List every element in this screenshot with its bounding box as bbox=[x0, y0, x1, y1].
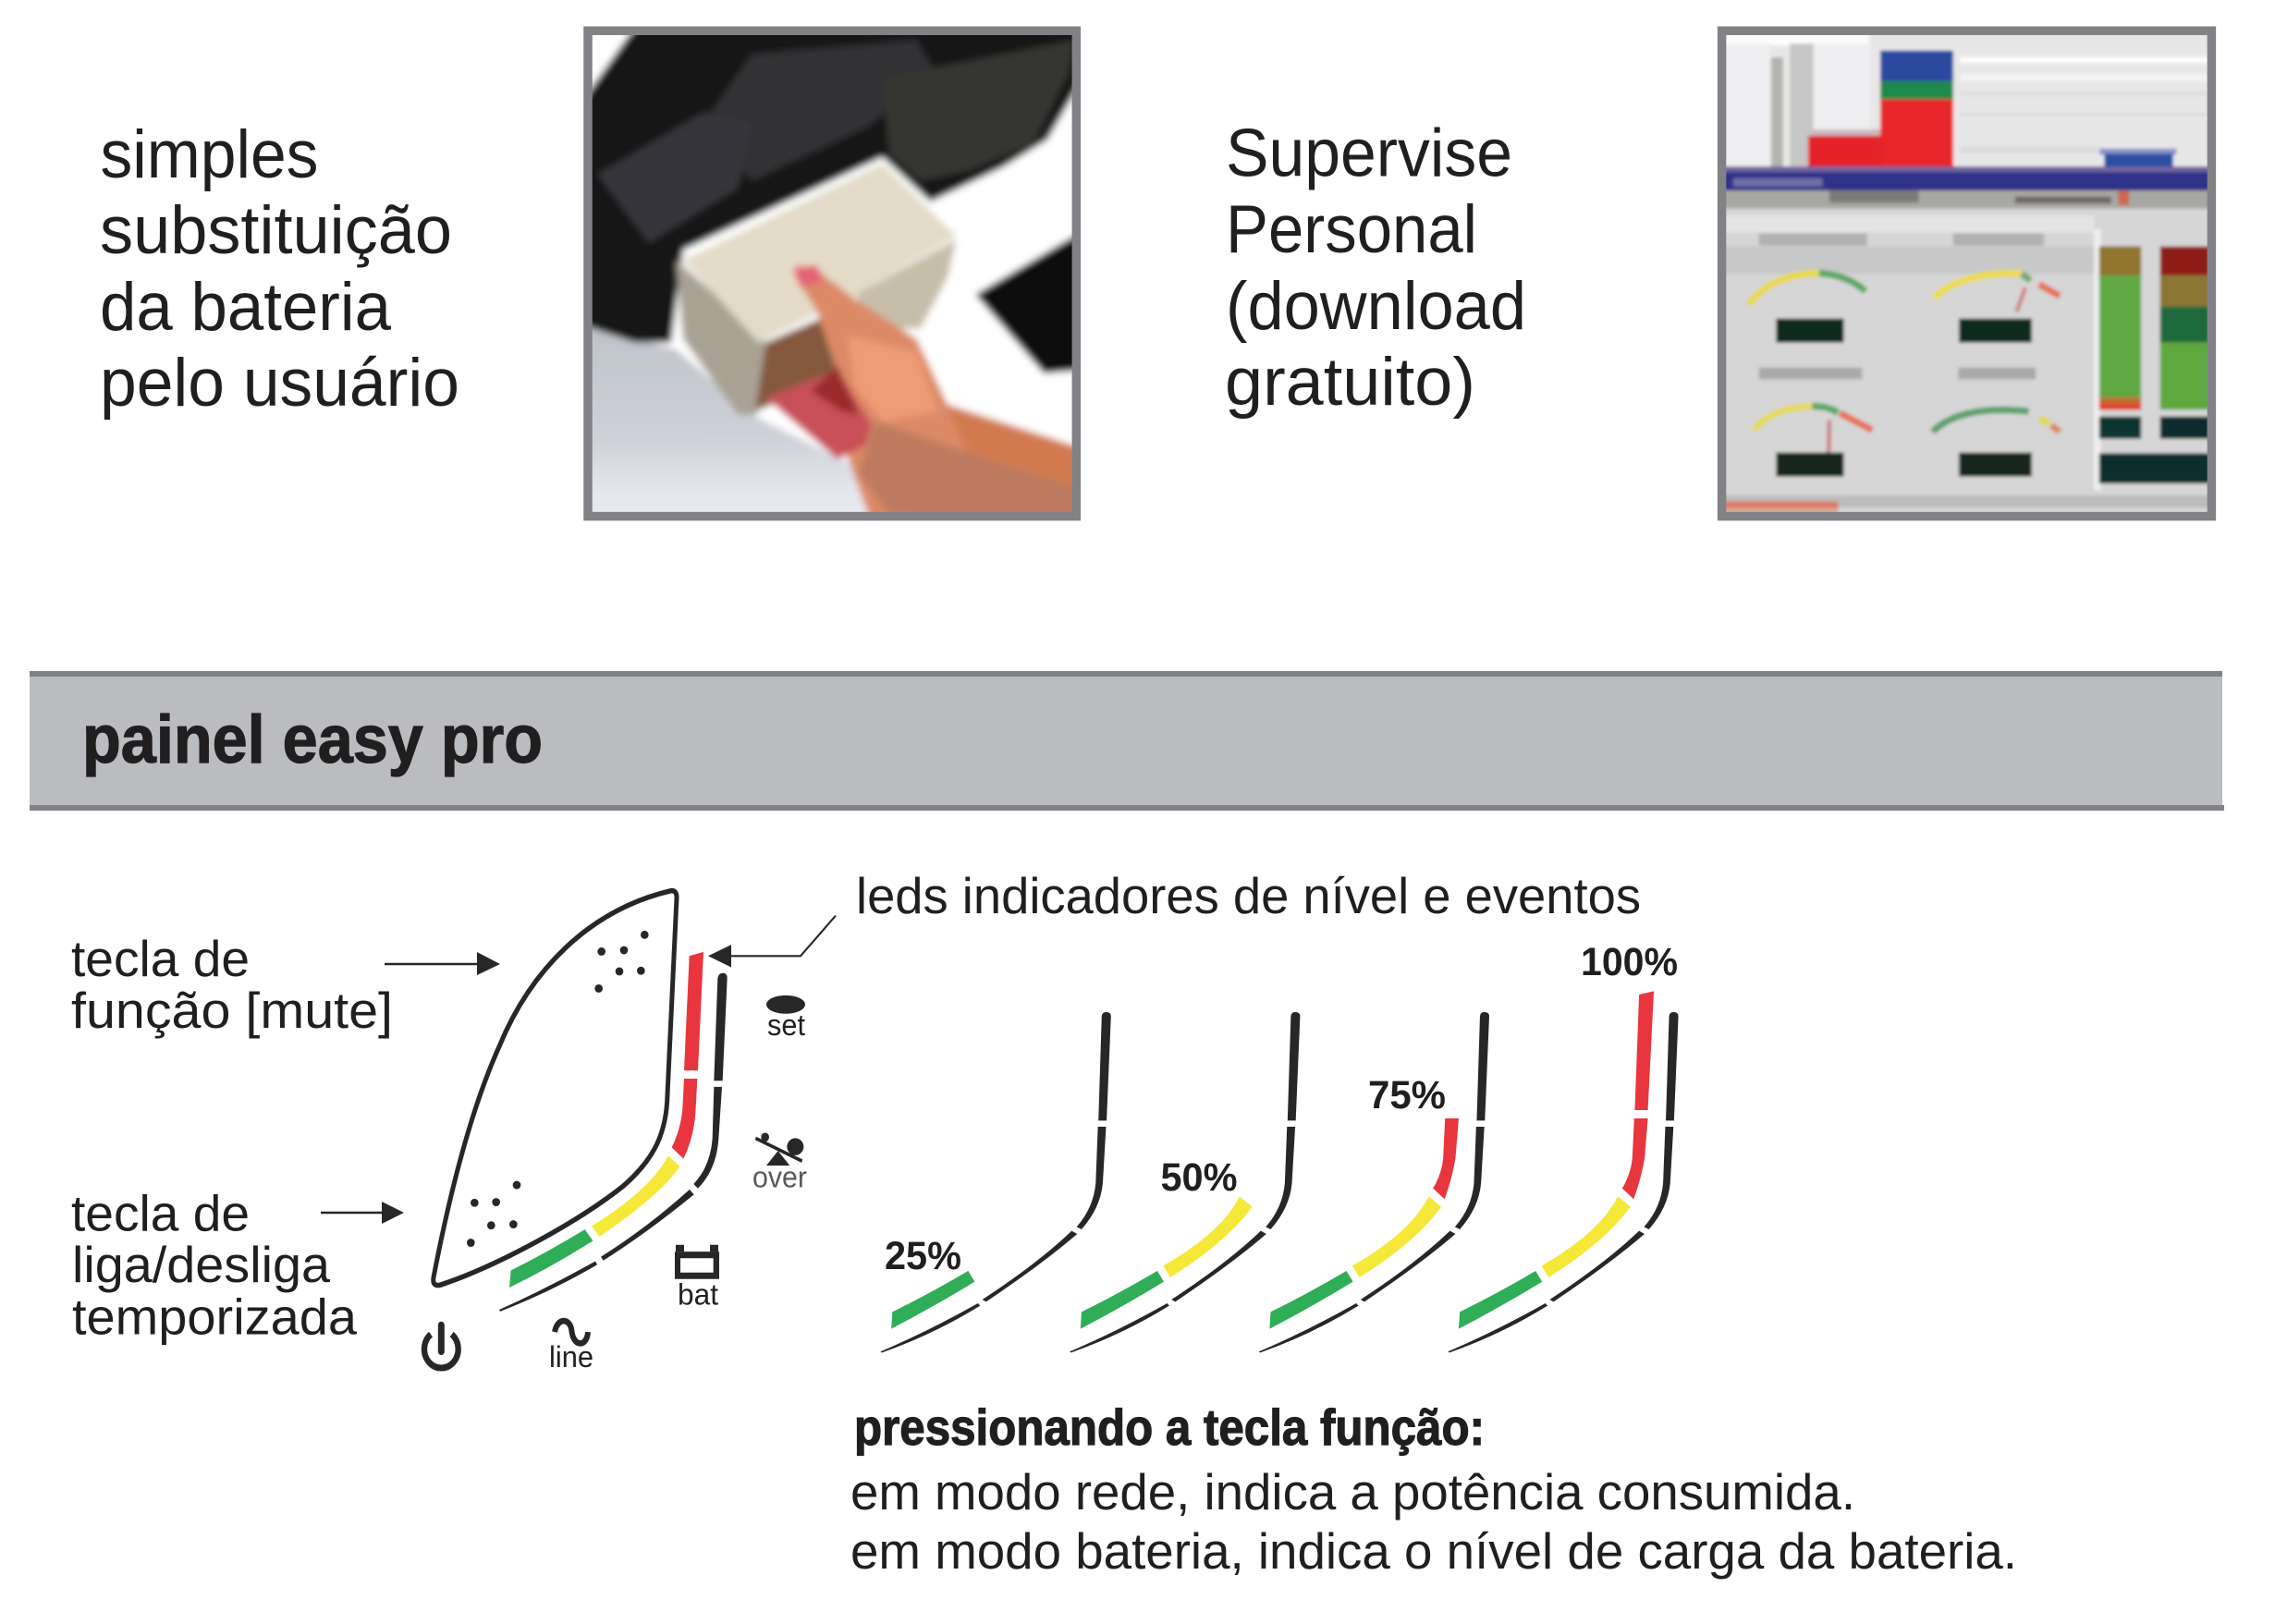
label: leds indicadores de nível e eventos: leds indicadores de nível e eventos bbox=[856, 867, 1641, 924]
text: pressing the function key explanation: em modo bateria, indica o nível de carga da bateria. bbox=[850, 1522, 2017, 1580]
icon captions: bat bbox=[678, 1277, 718, 1311]
label: tecla de liga/desliga temporizada: tecla de bbox=[71, 1185, 250, 1242]
arrow: to mute key bbox=[385, 952, 500, 975]
icon: battery bbox=[675, 1245, 719, 1279]
section header: painel easy pro bbox=[30, 671, 2224, 811]
icon: set key bbox=[766, 995, 805, 1014]
gauge: 100% bbox=[1448, 991, 1679, 1352]
gauge percent labels: 25% bbox=[885, 1234, 961, 1278]
photo: hand replacing the battery bbox=[583, 27, 1085, 525]
text: Supervise Personal (download gratuito): Supervise bbox=[1226, 116, 1512, 190]
label: tecla de função [mute]: função [mute] bbox=[71, 982, 393, 1039]
icon captions: over bbox=[752, 1161, 807, 1194]
heading text: painel easy pro bbox=[82, 702, 543, 777]
label: tecla de liga/desliga temporizada: temporizada bbox=[72, 1288, 357, 1346]
photo: Supervise Personal software screenshot bbox=[1719, 27, 2221, 521]
text: Supervise Personal (download gratuito): gratuito) bbox=[1225, 345, 1475, 420]
gauge percent labels bbox=[885, 940, 1678, 1278]
text: Supervise Personal (download gratuito): Personal bbox=[1226, 192, 1477, 267]
icon captions bbox=[549, 1008, 807, 1374]
gauge: 25% bbox=[880, 1012, 1111, 1352]
text: simples substituição da bateria pelo usuário: substituição bbox=[100, 193, 452, 268]
black level line bbox=[499, 973, 728, 1312]
key outline bbox=[434, 891, 677, 1286]
text: pressing the function key explanation: pressionando a tecla função: bbox=[854, 1398, 1485, 1456]
text: simples substituição da bateria pelo usuário: pelo usuário bbox=[100, 346, 459, 421]
text: Supervise Personal (download gratuito): (download bbox=[1226, 269, 1526, 344]
LED bar bbox=[509, 952, 703, 1288]
icon: line sine wave bbox=[555, 1321, 588, 1343]
label: tecla de função [mute]: tecla de bbox=[71, 930, 250, 987]
panel illustration: keypad with LEDs bbox=[424, 891, 836, 1368]
text: Supervise Personal (download gratuito) bbox=[1225, 116, 1526, 420]
arrow: to power key bbox=[321, 1202, 404, 1224]
gauge percent labels: 100% bbox=[1581, 940, 1678, 984]
arrow: to LEDs bbox=[708, 916, 836, 968]
gauge percent labels: 50% bbox=[1161, 1155, 1237, 1200]
text: simples substituição da bateria pelo usuário: da bateria bbox=[100, 270, 391, 345]
icon captions: line bbox=[549, 1340, 593, 1374]
icon: overload seesaw bbox=[755, 1132, 803, 1166]
text: simples substituição da bateria pelo usuário: simples bbox=[100, 117, 318, 192]
text: pressing the function key explanation bbox=[850, 1398, 2017, 1580]
icon captions: set bbox=[767, 1008, 805, 1042]
label: tecla de liga/desliga temporizada: liga/desliga bbox=[72, 1236, 330, 1293]
text: simples substituição da bateria pelo usuário bbox=[100, 117, 459, 421]
gauge: 75% bbox=[1259, 1012, 1489, 1352]
gauge percent labels: 75% bbox=[1368, 1073, 1446, 1117]
key dots bbox=[467, 931, 649, 1247]
label: tecla de função [mute] bbox=[71, 930, 393, 1039]
gauge: 50% bbox=[1070, 1012, 1300, 1352]
text: pressing the function key explanation: em modo rede, indica a potência consumida. bbox=[850, 1463, 1855, 1520]
label: tecla de liga/desliga temporizada bbox=[71, 1185, 357, 1346]
icon: power bbox=[424, 1325, 459, 1368]
